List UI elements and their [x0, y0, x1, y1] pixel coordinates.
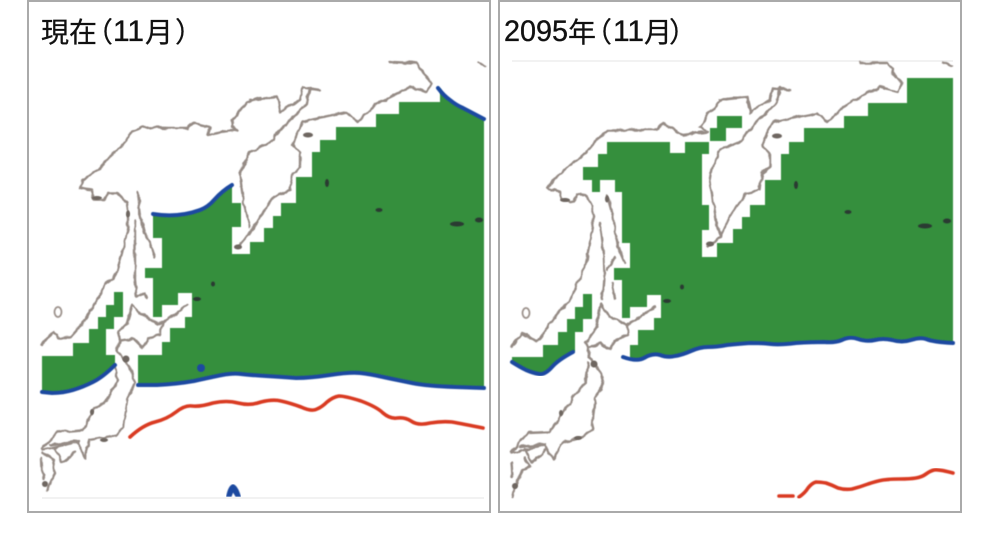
blue line: ice limit	[42, 88, 484, 393]
heading: present: 現在	[41, 11, 97, 51]
islands	[54, 132, 483, 317]
heading: 2095: 2095	[504, 15, 568, 48]
heading: present: 月	[145, 11, 173, 51]
heading: present: （	[85, 11, 113, 51]
coastline: Kamchatka	[238, 62, 484, 247]
map frame lines	[512, 60, 953, 62]
islands	[522, 134, 951, 318]
panel frame left	[28, 1, 490, 512]
coastlines: present	[42, 62, 484, 490]
green area: Sea of Japan	[512, 294, 592, 374]
coastline: Sakhalin	[600, 88, 790, 300]
heading: 2095: 月	[644, 11, 672, 51]
red line	[779, 470, 953, 497]
blue line: ice limit	[512, 338, 953, 374]
coast nodes	[512, 196, 609, 489]
red line	[130, 396, 483, 437]
coast nodes	[42, 196, 130, 487]
coastline: Hokkaido	[586, 305, 655, 350]
heading: 2095	[504, 11, 697, 51]
green area: Sea of Japan	[42, 292, 123, 393]
panel frame right	[499, 1, 961, 512]
coastline: Asia	[512, 97, 740, 347]
map frame lines	[42, 497, 484, 499]
blue dot	[197, 364, 205, 372]
green patch: north strait	[710, 116, 742, 141]
heading: 2095: （	[584, 11, 612, 51]
map: present	[42, 62, 484, 498]
heading: present: ）	[175, 11, 203, 51]
heading: present: 11	[113, 15, 144, 48]
heading: 2095: 年	[568, 11, 596, 51]
coastline: Sakhalin	[135, 88, 320, 298]
map: 2095	[512, 61, 953, 497]
coastline: Kamchatka	[707, 62, 952, 247]
green area: Pacific and Sea of Okhotsk	[583, 78, 953, 360]
panel: 2095 (November)	[499, 1, 961, 512]
heading: 2095: ）	[669, 11, 697, 51]
green area: Pacific and Sea of Okhotsk	[138, 88, 484, 388]
coastline: Honshu	[42, 340, 135, 490]
panel: present (November)	[28, 1, 490, 512]
coastlines: 2095	[512, 62, 952, 497]
coastline: Honshu	[512, 348, 603, 497]
coastline: Asia	[42, 97, 260, 345]
heading: present	[41, 11, 203, 51]
coastline: Hokkaido	[118, 305, 187, 348]
heading: 2095: 11	[613, 15, 644, 48]
blue marker	[227, 485, 240, 496]
